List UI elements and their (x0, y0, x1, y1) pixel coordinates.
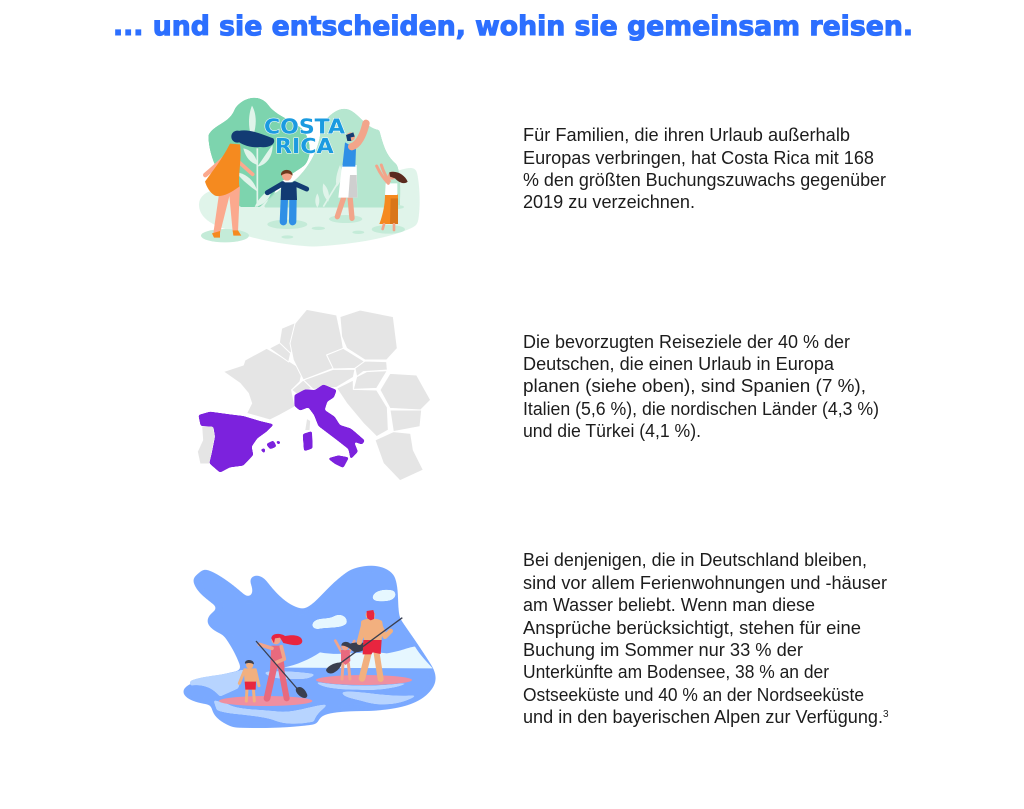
map: Europe with Spain and Italy highlighted (197, 309, 431, 481)
text block: Germany (523, 550, 889, 727)
text block: Germany: und in den bayerischen Alpen zur Verfügung. (523, 707, 883, 727)
text block: Europe destinations: Die bevorzugten Reiseziele der 40 % der (523, 332, 850, 352)
paddle boards (219, 675, 412, 706)
text block: Germany: Ansprüche berücksichtigt, stehen für eine (523, 618, 861, 638)
figure: girl in orange trousers (377, 165, 408, 230)
figure: man with paddle (326, 610, 402, 679)
highlighted: Spain (198, 412, 281, 473)
figure: man (337, 123, 366, 218)
text block: Germany: Ostseeküste und 40 % an der Nordseeküste (523, 685, 864, 705)
text block: Germany: sind vor allem Ferienwohnungen und -häuser (523, 573, 887, 593)
text block: Germany: am Wasser beliebt. Wenn man diese (523, 595, 815, 615)
figure: woman in orange dress (205, 130, 274, 238)
illustration: family stand-up paddling (183, 566, 436, 728)
text block: Europe destinations (523, 332, 879, 441)
text block: Europe destinations: planen (siehe oben), sind Spanien (7 %), (523, 376, 866, 396)
illustration: family in Costa Rica (199, 98, 420, 247)
text block: Germany: Bei denjenigen, die in Deutschland bleiben, (523, 550, 867, 570)
text block: Costa Rica (523, 125, 886, 212)
text block: Europe destinations: Italien (5,6 %), die nordischen Länder (4,3 %) (523, 399, 879, 419)
highlighted: Italy (294, 384, 365, 468)
figure: child (267, 170, 307, 222)
distant shore (283, 647, 433, 668)
figure: woman with paddle (256, 634, 307, 698)
text block: Costa Rica: Europas verbringen, hat Costa Rica mit 168 (523, 148, 874, 168)
text block: Germany: Unterkünfte am Bodensee, 38 % an der (523, 662, 829, 682)
text block: Costa Rica: Für Familien, die ihren Urlaub außerhalb (523, 125, 850, 145)
label: Costa Rica lettering: RICA (275, 134, 334, 158)
text block: Germany: 3 (883, 709, 889, 720)
water highlights (190, 669, 417, 724)
clouds (312, 590, 395, 629)
text block: Germany: Buchung im Sommer nur 33 % der (523, 640, 803, 660)
text block: Europe destinations: und die Türkei (4,1 %). (523, 421, 701, 441)
figure: girl on right board (335, 641, 367, 679)
text block: Costa Rica: 2019 zu verzeichnen. (523, 192, 695, 212)
text block: Costa Rica: % den größten Buchungszuwachs gegenüber (523, 170, 886, 190)
figure: child on left board (239, 660, 259, 701)
title: ... und sie entscheiden, wohin sie gemeinsam reisen. (113, 11, 913, 42)
text block: Europe destinations: Deutschen, die einen Urlaub in Europa (523, 354, 835, 374)
label: Costa Rica lettering (264, 115, 346, 158)
grey countries of Europe (197, 309, 431, 481)
label: Costa Rica lettering: COSTA (264, 115, 346, 139)
